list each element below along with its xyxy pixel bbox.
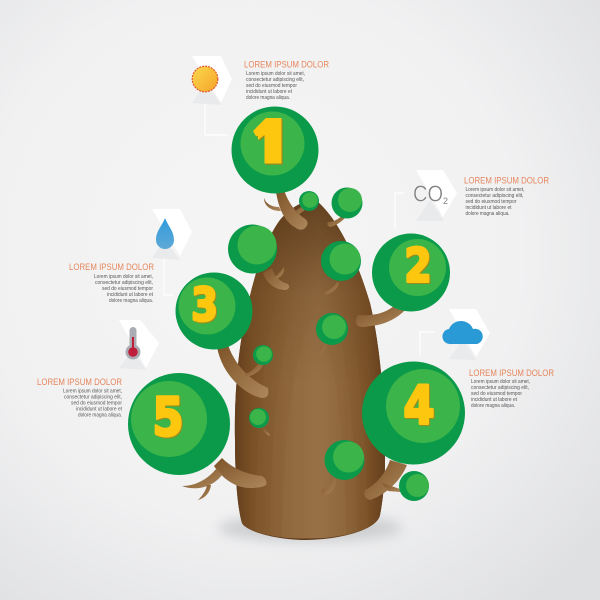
icon: water drop (152, 209, 192, 260)
text block 5: LOREM IPSUM DOLOR (37, 377, 122, 387)
text block 5: dolore magna aliqua. (78, 412, 122, 418)
text block 3: LOREM IPSUM DOLOR (69, 262, 154, 272)
tree crown 2: 2 (406, 240, 432, 294)
tree crown 2: 2 (404, 238, 432, 292)
text block 5: Lorem ipsum dolor sit amet, (63, 388, 122, 394)
tree crown 3: 3 (192, 280, 219, 332)
tree crown 3: 3 (191, 278, 218, 332)
text block 1: Lorem ipsum dolor sit amet, (246, 71, 305, 77)
connector lines (164, 103, 435, 355)
icon: cloud (442, 309, 490, 360)
text block 1: dolore magna aliqua. (246, 95, 290, 101)
tree crown 1: 1 (248, 106, 292, 178)
text block 5: incididunt ut labore et (76, 406, 122, 412)
tree crown 4: 4 (404, 376, 436, 438)
tree trunk (230, 198, 390, 545)
tree crown 3 (176, 272, 252, 350)
ground shadow (218, 514, 402, 542)
icon: thermometer (119, 320, 159, 370)
icon: sun (192, 56, 232, 105)
text block 2: consectetur adipiscing elit, (466, 193, 524, 199)
text block 5: sed do eiusmod tempor (71, 400, 122, 406)
tree crown 2 (372, 234, 450, 312)
tree crown 4: 4 (404, 376, 434, 436)
text block 1: LOREM IPSUM DOLOR (244, 60, 329, 70)
text block 2: LOREM IPSUM DOLOR (464, 176, 549, 186)
text block 2: dolore magna aliqua. (466, 211, 510, 217)
text block 3: incididunt ut labore et (107, 292, 153, 298)
text block 1: sed do eiusmod tempor (246, 83, 297, 89)
tree crown 5: 5 (154, 388, 184, 450)
icon: CO2: CO (413, 180, 443, 206)
tree crown 1 (232, 106, 318, 194)
text block 2 (464, 176, 549, 217)
text block 3 (69, 262, 154, 304)
text block 1: consectetur adipiscing elit, (246, 77, 304, 83)
icon: CO2: 2 (443, 196, 448, 206)
tree crown 1: 1 (250, 107, 293, 180)
text block 2: incididunt ut labore et (466, 205, 512, 211)
text block 4: consectetur adipiscing elit, (471, 385, 529, 391)
tree crown 5: 5 (152, 388, 184, 448)
text block 4: incididunt ut labore et (471, 397, 517, 403)
text block 2: sed do eiusmod tempor (466, 199, 517, 205)
text block 3: dolore magna aliqua. (109, 298, 153, 304)
text block 4 (469, 368, 554, 409)
text block 3: sed do eiusmod tempor (102, 286, 153, 292)
text block 4: dolore magna aliqua. (471, 403, 515, 409)
text block 3: Lorem ipsum dolor sit amet, (94, 274, 153, 280)
text block 5: consectetur adipiscing elit, (64, 394, 122, 400)
tree crown 4 (362, 362, 465, 464)
tree crown 5 (128, 373, 230, 475)
text block 5 (37, 377, 122, 418)
text block 1: incididunt ut labore et (246, 89, 292, 95)
icon: CO2 (413, 170, 457, 221)
text block 4: sed do eiusmod tempor (471, 391, 522, 397)
branches (182, 190, 407, 500)
text block 4: LOREM IPSUM DOLOR (469, 368, 554, 378)
text block 3: consectetur adipiscing elit, (95, 280, 153, 286)
text block 4: Lorem ipsum dolor sit amet, (471, 379, 530, 385)
text block 2: Lorem ipsum dolor sit amet, (466, 187, 525, 193)
text block 1 (244, 60, 329, 101)
small leaf circles (228, 188, 429, 501)
